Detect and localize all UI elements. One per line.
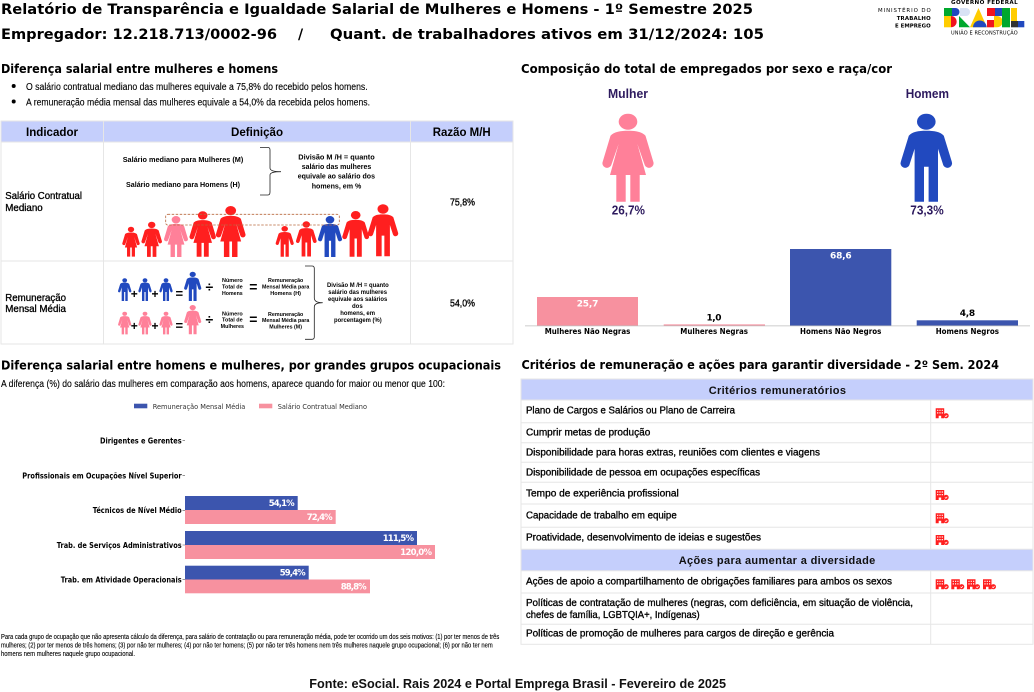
diagram: women average pay: =	[176, 318, 184, 333]
bar chart: diferença por grupo: Trab. em Atividade Operacionais	[61, 576, 182, 584]
legend	[134, 403, 367, 411]
text block: average pay definition: Divisão M /H = quanto	[327, 283, 389, 289]
bar chart: sexo e raça/cor: Homens Negros	[936, 327, 1000, 336]
panel: diferença salarial	[1, 62, 513, 344]
bar chart: diferença por grupo: 88,8%	[341, 582, 367, 592]
marker: median highlight box	[166, 214, 339, 225]
bar chart: sexo e raça/cor: 68,6	[830, 252, 852, 262]
text block: median salary definition: Divisão M /H = quanto	[298, 152, 375, 162]
diagram: women average pay: ÷	[205, 311, 213, 327]
diagram: men average pay: +	[131, 287, 138, 301]
table: critérios remuneratórios e ações: Políticas de promoção de mulheres para cargos de direção e gerência	[526, 629, 834, 640]
icon: women ordered by salary	[122, 206, 246, 257]
text block: key findings	[12, 82, 370, 108]
logo: Governo Federal Brasil: UNIÃO E RECONSTRUÇÃO	[951, 30, 1018, 37]
heading: grupos ocupacionais: Diferença salarial entre homens e mulheres, por grandes grupos ocupacionais	[1, 358, 501, 372]
bar chart: sexo e raça/cor: 25,7	[577, 300, 598, 310]
table: critérios remuneratórios e ações: Tempo de experiência profissional	[526, 489, 679, 500]
table: critérios remuneratórios e ações: chefes de família, LGBTQIA+, Indígenas)	[526, 610, 700, 621]
logo: Ministério do Trabalho e Emprego: E EMPREGO	[895, 23, 931, 29]
text block: average pay definition: homens, em	[340, 311, 375, 317]
table: critérios remuneratórios e ações: Capacidade de trabalho em equipe	[526, 511, 677, 522]
table: critérios remuneratórios e ações: Cumprir metas de produção	[526, 428, 651, 439]
logo: Ministério do Trabalho e Emprego: MINISTÉRIO DO	[878, 6, 931, 14]
diagram: men average pay: +	[151, 287, 159, 301]
bar chart: diferença por grupo: 111,5%	[383, 534, 414, 544]
icon: homem 73,3%	[901, 86, 952, 217]
diagram: men average pay: ÷	[205, 278, 213, 294]
icon: homem 73,3%: Homem	[906, 86, 949, 101]
bar chart: sexo e raça/cor: Homens Não Negros	[800, 327, 882, 336]
diagram: women average pay: Remuneração	[268, 312, 303, 318]
icon: men ordered by salary	[276, 204, 398, 257]
diagram: women average pay	[118, 305, 310, 334]
text block: average pay definition	[305, 266, 389, 339]
panel: grupos ocupacionais	[1, 358, 501, 658]
diagram: men average pay: =	[176, 286, 184, 301]
diagram: men average pay: Total de	[222, 284, 243, 290]
table: critérios remuneratórios e ações: Proatividade, desenvolvimento de ideias e sugestões	[526, 533, 761, 544]
diagram: men average pay: Mensal Média para	[262, 284, 310, 290]
table: indicators: Definição	[231, 125, 283, 139]
text block: average pay definition: equivale aos salários	[328, 297, 388, 303]
value: razão remuneração média: 54,0%	[450, 299, 475, 310]
table: critérios remuneratórios e ações: Critérios remuneratórios	[709, 385, 846, 397]
diagram: women average pay: Total de	[222, 318, 243, 324]
bar chart: diferença por grupo: 54,1%	[269, 499, 295, 509]
text block: key findings: O salário contratual mediano das mulheres equivale a 75,8% do recebido pelos homens.	[26, 82, 368, 93]
bar chart: sexo e raça/cor	[525, 249, 1030, 336]
text block: average pay definition: salário das mulheres	[328, 290, 388, 296]
bar chart: sexo e raça/cor: Mulheres Não Negras	[545, 327, 631, 336]
title: report heading	[1, 2, 764, 43]
text block: footnote: mulheres; (2) por ter menos de três homens; (3) por não ter mulheres; (4) por não ter homens; (5) por não ter três homens nem três mulheres naquele grupo ocupacional; (6) por não ter nem	[1, 640, 493, 650]
diagram: women average pay: =	[249, 311, 257, 327]
bar chart: sexo e raça/cor: 4,8	[960, 309, 975, 319]
row label: salário contratual mediano: Mediano	[5, 203, 43, 214]
diagram: men average pay: Remuneração	[268, 278, 303, 284]
bar chart: diferença por grupo: 72,4%	[307, 513, 333, 523]
heading: diferença salarial: Diferença salarial entre mulheres e homens	[1, 62, 278, 76]
heading: composição: Composição do total de empregados por sexo e raça/cor	[521, 62, 892, 76]
text block: median salary definition: Salário mediano para Mulheres (M)	[123, 155, 244, 164]
icon: mulher 26,7%: Mulher	[608, 86, 648, 101]
bar chart: diferença por grupo: Profissionais em Ocupações Nível Superior	[22, 472, 182, 480]
text block: median salary definition: Salário mediano para Homens (H)	[126, 180, 240, 189]
row label: remuneração mensal média: Mensal Média	[5, 304, 66, 315]
bar chart: diferença por grupo: Trab. de Serviços Administrativos	[57, 541, 182, 550]
diagram: men average pay: Homens (H)	[270, 291, 301, 297]
text block: median salary definition: equivale ao salário dos	[298, 172, 375, 180]
bar chart: diferença por grupo	[22, 436, 435, 593]
bar chart: diferença por grupo: 59,4%	[280, 568, 306, 578]
diagram: men average pay: =	[249, 278, 257, 294]
row label: remuneração mensal média	[5, 293, 66, 315]
bar chart: sexo e raça/cor: 1,0	[706, 314, 722, 324]
diagram: women average pay: +	[131, 319, 138, 333]
icon: homem 73,3%: 73,3%	[910, 203, 944, 217]
legend: Remuneração Mensal Média	[153, 403, 245, 411]
legend: Salário Contratual Mediano	[278, 403, 367, 411]
table: critérios remuneratórios e ações	[521, 379, 1033, 644]
title: report heading: /	[298, 27, 304, 43]
logo: Ministério do Trabalho e Emprego: TRABALHO	[897, 16, 931, 22]
bar chart: sexo e raça/cor: Mulheres Negras	[680, 327, 748, 336]
diagram: women average pay: +	[151, 319, 159, 333]
text block: median salary definition: homens, em %	[312, 182, 362, 190]
text block: chart subtitle: A diferença (%) do salário das mulheres em comparação aos homens, aparece quando for maior ou menor que 100:	[1, 379, 445, 390]
text block: average pay definition: dos	[352, 304, 363, 310]
bar chart: diferença por grupo: Dirigentes e Gerentes	[100, 436, 182, 446]
text block: footnote	[1, 632, 499, 658]
table: critérios remuneratórios e ações: Plano de Cargos e Salários ou Plano de Carreira	[526, 406, 735, 417]
bar chart: diferença por grupo: Técnicos de Nível Médio	[93, 506, 182, 515]
diagram: women average pay: Número	[222, 312, 243, 318]
icon: mulher 26,7%: 26,7%	[612, 203, 645, 217]
title: report heading: Relatório de Transparência e Igualdade Salarial de Mulheres e Homens - 1º Semestre 2025	[1, 2, 753, 18]
icon: empresas marcadas	[936, 408, 996, 589]
diagram: men average pay: Homens	[222, 291, 243, 297]
table: indicators: Indicador	[26, 125, 78, 139]
text block: average pay definition: porcentagem (%)	[334, 318, 382, 324]
value: razão salário contratual: 75,8%	[450, 198, 475, 209]
table: indicators	[1, 121, 513, 344]
icon: mulher 26,7%	[602, 86, 654, 217]
panel: critérios e ações	[521, 358, 1033, 644]
text block: median salary definition: salário das mulheres	[302, 162, 371, 171]
row label: salário contratual mediano	[5, 191, 82, 214]
row label: salário contratual mediano: Salário Contratual	[5, 191, 82, 202]
text block: source: Fonte: eSocial. Rais 2024 e Portal Emprega Brasil - Fevereiro de 2025	[309, 677, 726, 691]
row label: remuneração mensal média: Remuneração	[5, 293, 66, 304]
logo: Governo Federal Brasil: GOVERNO FEDERAL	[951, 0, 1018, 6]
table: critérios remuneratórios e ações: Ações para aumentar a diversidade	[679, 555, 875, 567]
table: indicators: Razão M/H	[433, 125, 491, 139]
diagram: women average pay: Mensal Média para	[262, 318, 310, 324]
bar chart: diferença por grupo: 120,0%	[400, 548, 432, 558]
table: critérios remuneratórios e ações: Ações de apoio a compartilhamento de obrigações familiares para ambos os sexos	[526, 577, 892, 588]
diagram: men average pay: Número	[222, 278, 243, 284]
text block: median salary definition	[123, 148, 375, 195]
title: report heading: Quant. de trabalhadores ativos em 31/12/2024: 105	[330, 27, 764, 43]
panel: composição por sexo e raça/cor	[521, 62, 1030, 336]
table: critérios remuneratórios e ações: Políticas de contratação de mulheres (negras, com deficiência, em situação de violência,	[526, 598, 913, 609]
logo: Ministério do Trabalho e Emprego	[878, 6, 931, 29]
title: report heading: Empregador: 12.218.713/0002-96	[1, 27, 277, 43]
text block: key findings: A remuneração média mensal das mulheres equivale a 54,0% da recebida pelos homens.	[26, 98, 370, 108]
table: critérios remuneratórios e ações: Disponibilidade de pessoa em ocupações específicas	[526, 468, 760, 479]
table: critérios remuneratórios e ações: Disponibilidade para horas extras, reuniões com clientes e viagens	[526, 448, 820, 459]
logo: Governo Federal Brasil	[944, 0, 1024, 37]
diagram: women average pay: Mulheres	[221, 324, 244, 330]
heading: critérios e ações: Critérios de remuneração e ações para garantir diversidade - 2º Sem. 2024	[522, 358, 999, 372]
diagram: men average pay	[118, 272, 310, 301]
text block: footnote: homens nem mulheres naquele grupo ocupacional.	[1, 649, 135, 658]
text block: footnote: Para cada grupo de ocupação que não apresenta cálculo da diferença, para salário de contratação ou para remuneração média, pode ter ocorrido um dos seis motivos: (1) por ter menos de três	[1, 632, 499, 641]
diagram: women average pay: Mulheres (M)	[269, 324, 302, 330]
